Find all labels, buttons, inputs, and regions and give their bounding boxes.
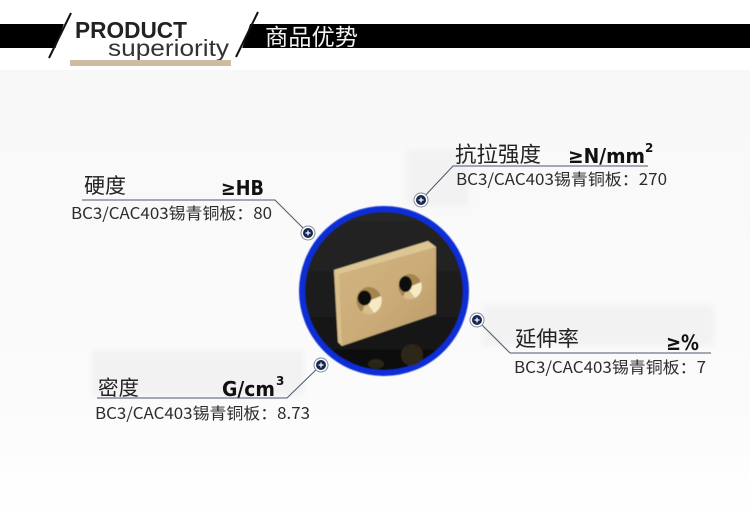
callout: tensile strength bbox=[414, 138, 667, 207]
background texture patches bbox=[92, 150, 714, 396]
brass plate bbox=[334, 241, 436, 346]
value: BC3/CAC403锡青铜板：80 bbox=[71, 200, 272, 224]
product circle bbox=[302, 209, 466, 373]
marker bbox=[314, 358, 328, 372]
marker bbox=[301, 226, 315, 240]
header band bbox=[0, 0, 750, 70]
label: 抗拉强度 bbox=[455, 138, 541, 169]
value: BC3/CAC403锡青铜板：8.73 bbox=[95, 400, 310, 424]
marker bbox=[470, 313, 484, 327]
heading: PRODUCT: PRODUCT bbox=[75, 17, 188, 43]
hole left bbox=[356, 287, 382, 314]
reflection bbox=[368, 344, 423, 369]
hole right bbox=[398, 274, 422, 299]
unit: ≥N/mm bbox=[568, 144, 645, 168]
slash left bbox=[49, 13, 71, 58]
callout: elongation bbox=[470, 313, 711, 378]
label: 硬度 bbox=[84, 170, 126, 200]
marker bbox=[414, 193, 428, 207]
unit: ≥HB bbox=[221, 176, 264, 200]
heading: Chinese title: 商品优势 bbox=[265, 24, 358, 50]
callout: tensile strength: 2 bbox=[645, 141, 653, 155]
slash right bbox=[236, 12, 258, 57]
heading: superiority: superiority bbox=[108, 35, 229, 61]
unit: ≥% bbox=[666, 331, 699, 355]
header white notch bbox=[48, 0, 258, 70]
callout: density bbox=[95, 358, 328, 424]
unit: G/cm bbox=[222, 377, 275, 401]
value: BC3/CAC403锡青铜板：7 bbox=[514, 354, 706, 378]
callout: hardness bbox=[71, 170, 315, 240]
callout: density: 3 bbox=[276, 374, 284, 388]
value: BC3/CAC403锡青铜板：270 bbox=[456, 166, 667, 190]
tan bar bbox=[70, 60, 231, 66]
label: 密度 bbox=[98, 371, 139, 401]
label: 延伸率 bbox=[515, 322, 579, 353]
